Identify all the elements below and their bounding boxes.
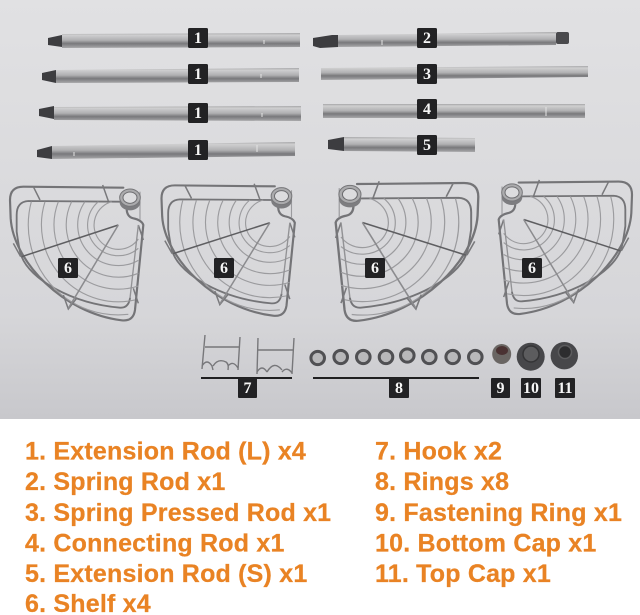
shelf 4: 6 — [528, 260, 536, 277]
fastening ring with label 9: 9 — [496, 380, 504, 397]
parts list: right column: 10. Bottom Cap x1 — [375, 530, 597, 558]
parts list: right column: 7. Hook x2 — [375, 438, 502, 466]
rod 1 first — [48, 28, 300, 48]
shelf 2 — [161, 184, 295, 316]
rod 4: 4 — [423, 101, 431, 118]
rings with label 8: 8 — [395, 380, 403, 397]
rod 2 — [313, 28, 569, 48]
parts list: left column: 2. Spring Rod x1 — [25, 468, 225, 496]
rod 1 third: 1 — [194, 105, 202, 122]
rod 3: 3 — [423, 66, 431, 83]
parts list: left column: 5. Extension Rod (S) x1 — [25, 560, 307, 588]
hooks with label 7: 7 — [244, 380, 252, 397]
top cap with label 11: 11 — [557, 380, 573, 397]
shelf 4 — [499, 180, 632, 314]
parts list: left column: 1. Extension Rod (L) x4 — [25, 438, 306, 466]
rod 5 — [328, 135, 475, 155]
shelf 1: 6 — [64, 260, 72, 277]
parts list: right column: 11. Top Cap x1 — [375, 560, 551, 588]
bottom cap with label 10: 10 — [523, 380, 539, 397]
rod 4 — [323, 99, 585, 119]
shelf 3 — [336, 181, 478, 321]
rod 1 second — [42, 64, 299, 84]
parts list: right column: 8. Rings x8 — [375, 468, 509, 496]
bottom cap with label 10 — [517, 343, 545, 398]
shelf 2: 6 — [220, 260, 228, 277]
parts list: left column: 3. Spring Pressed Rod x1 — [25, 499, 331, 527]
rod 1 second: 1 — [194, 66, 202, 83]
photo background panel — [0, 0, 640, 419]
rod 1 first: 1 — [194, 30, 202, 47]
rod 5: 5 — [423, 137, 431, 154]
rod 1 fourth — [37, 140, 295, 160]
rings with label 8 — [311, 349, 482, 398]
rod 1 third — [39, 103, 301, 123]
shelf 3: 6 — [371, 260, 379, 277]
top cap with label 11 — [551, 342, 578, 398]
rod 1 fourth: 1 — [194, 142, 202, 159]
parts list: right column — [375, 438, 622, 588]
rod 3 — [321, 64, 588, 84]
parts list: left column: 4. Connecting Rod x1 — [25, 530, 285, 558]
hooks with label 7 — [201, 335, 294, 398]
fastening ring with label 9 — [491, 344, 511, 398]
shelf 1 — [10, 185, 143, 320]
rod 2: 2 — [423, 30, 431, 47]
parts list: left column — [25, 438, 331, 615]
parts list: right column: 9. Fastening Ring x1 — [375, 499, 622, 527]
